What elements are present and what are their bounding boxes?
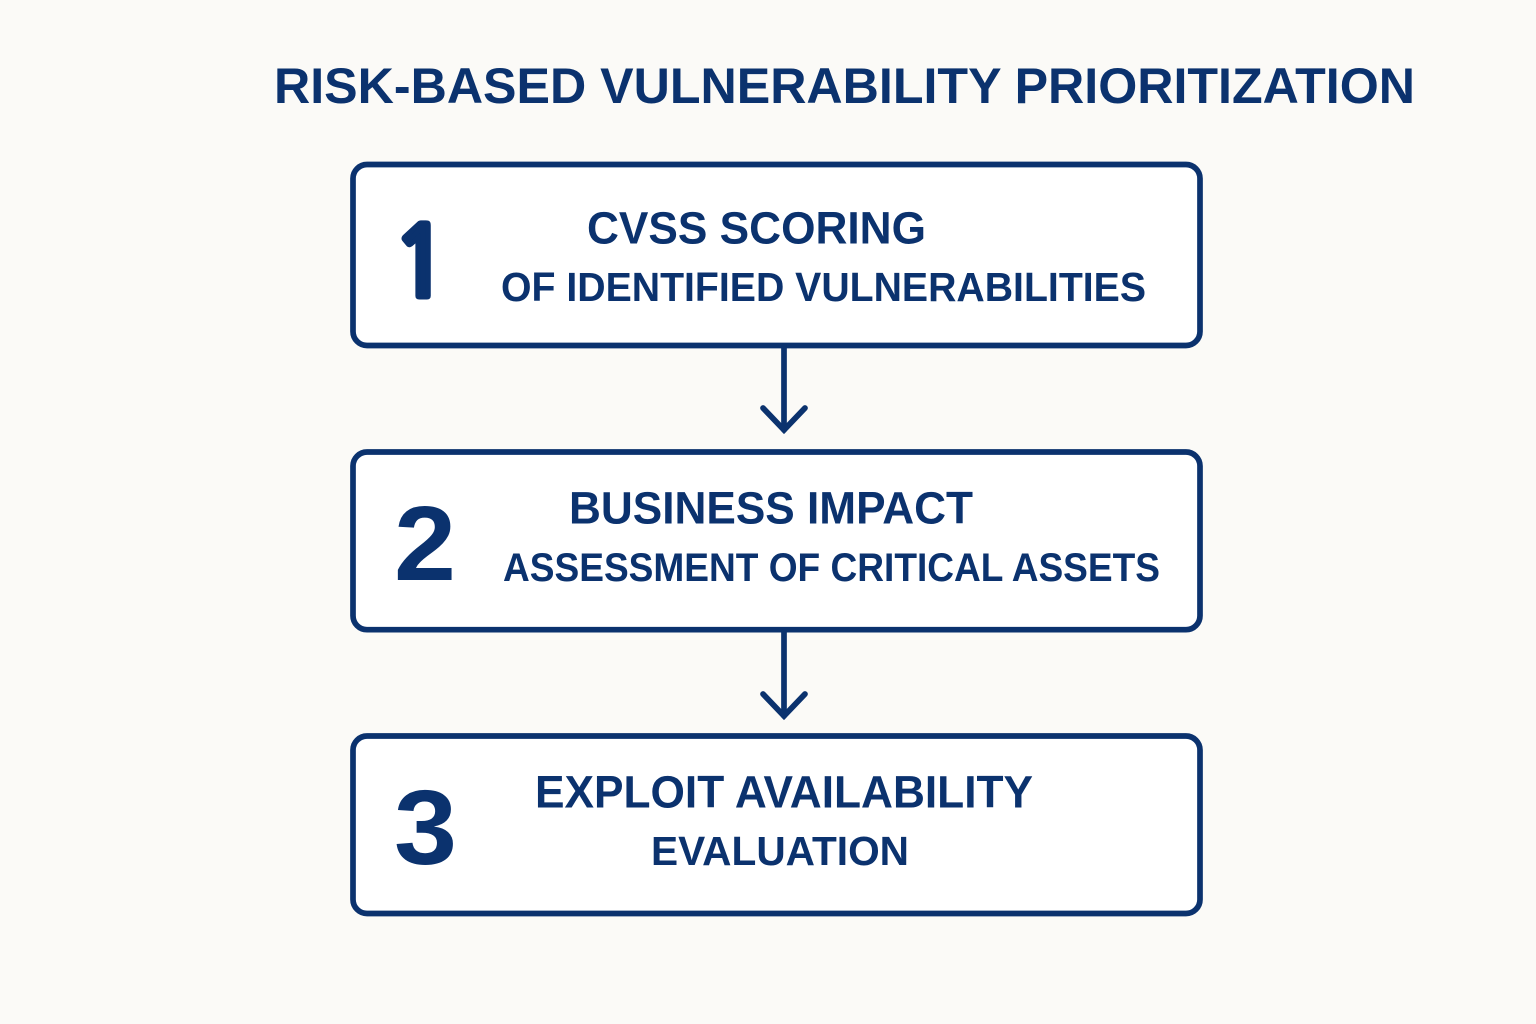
step 2 description: ASSESSMENT OF CRITICAL ASSETS	[503, 546, 1160, 590]
step 1 description: OF IDENTIFIED VULNERABILITIES	[501, 264, 1146, 310]
step 3 description: EVALUATION	[651, 828, 909, 874]
panel: step 3	[353, 736, 1200, 914]
step 1 heading: CVSS SCORING	[587, 202, 926, 254]
panel: step 1	[353, 164, 1200, 346]
arrow: step 1 to step 2	[763, 347, 805, 430]
arrow: step 2 to step 3	[763, 632, 805, 716]
title: RISK-BASED VULNERABILITY PRIORITIZATION	[274, 58, 1415, 114]
step 1 number: 1	[392, 216, 450, 312]
panel: step 2	[353, 452, 1200, 630]
step 3 heading: EXPLOIT AVAILABILITY	[535, 766, 1033, 818]
step 2 number: 2	[394, 485, 456, 603]
step 2 heading: BUSINESS IMPACT	[569, 482, 973, 534]
step 3 number: 3	[394, 769, 457, 887]
